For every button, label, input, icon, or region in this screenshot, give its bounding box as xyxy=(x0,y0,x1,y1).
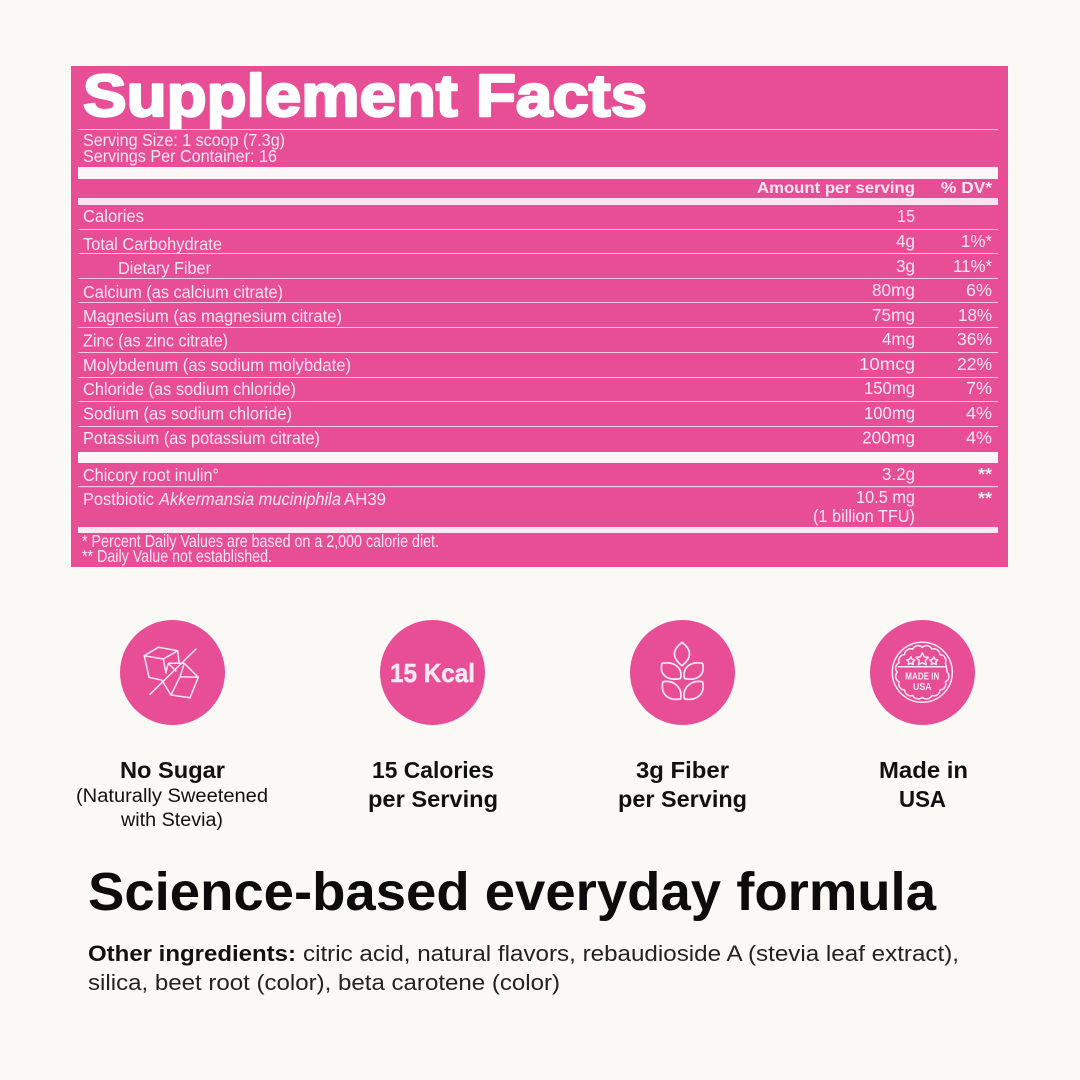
row: chloride xyxy=(83,378,992,399)
row: sodium: Sodium (as sodium chloride) xyxy=(83,404,292,424)
label: 15 calories: 15 Calories xyxy=(372,757,494,783)
footnotes xyxy=(82,531,439,566)
heading: Supplement Facts: Supplement Facts xyxy=(83,63,647,129)
row: calcium: 6% xyxy=(966,280,992,300)
serving information: Servings Per Container: 16 xyxy=(83,146,277,166)
row: calories xyxy=(83,206,915,226)
row: chloride: 7% xyxy=(966,378,992,398)
row: total carbohydrate xyxy=(83,231,992,254)
label: no sugar: (Naturally Sweetened xyxy=(76,786,268,807)
row: zinc: 4mg xyxy=(882,329,915,349)
label: no sugar: No Sugar xyxy=(120,757,225,783)
label: no sugar xyxy=(76,757,268,831)
row: magnesium: 75mg xyxy=(872,305,915,325)
row: dietary fiber xyxy=(118,256,992,278)
row: sodium: 4% xyxy=(966,403,992,423)
row: dietary fiber: 3g xyxy=(896,256,915,276)
icon: 15 Kcal xyxy=(380,620,485,725)
row: postbiotic: AH39 xyxy=(344,489,386,509)
row: potassium: 200mg xyxy=(862,428,915,448)
row: sodium: 100mg xyxy=(864,403,915,423)
icon: made in USA badge xyxy=(870,620,975,725)
row: total carbohydrate: 4g xyxy=(896,231,915,251)
row: postbiotic: ** xyxy=(978,488,992,508)
text block: other ingredients: citric acid, natural flavors, rebaudioside A (stevia leaf extract), xyxy=(303,941,959,966)
row: total carbohydrate: 1%* xyxy=(961,231,992,251)
serving information xyxy=(83,130,285,166)
table header: % DV* xyxy=(941,180,993,197)
row: zinc: 36% xyxy=(957,329,992,349)
row: zinc xyxy=(83,329,992,350)
label: 3g fiber: per Serving xyxy=(618,786,747,812)
row: zinc: Zinc (as zinc citrate) xyxy=(83,330,228,350)
table header: Amount per serving xyxy=(757,180,915,197)
footnotes: ** Daily Value not established. xyxy=(82,546,272,566)
label: no sugar: with Stevia) xyxy=(120,810,223,831)
row: calories: 15 xyxy=(897,206,915,226)
table header xyxy=(757,180,993,197)
row: chloride: Chloride (as sodium chloride) xyxy=(83,379,296,399)
row: magnesium xyxy=(83,305,992,326)
text block: other ingredients: silica, beet root (color), beta carotene (color) xyxy=(88,970,560,995)
icon: 15 Kcal: 15 Kcal xyxy=(390,658,475,688)
row: postbiotic: 10.5 mg xyxy=(856,487,915,507)
panel: supplement facts xyxy=(71,63,1008,567)
row: postbiotic xyxy=(83,487,992,526)
row: molybdenum: 10mcg xyxy=(859,354,915,374)
row: dietary fiber: 11%* xyxy=(953,256,992,276)
row: chicory root inulin: ** xyxy=(978,464,992,484)
row: total carbohydrate: Total Carbohydrate xyxy=(83,234,222,254)
row: chicory root inulin: Chicory root inulin° xyxy=(83,465,219,485)
heading: science-based everyday formula: Science-based everyday formula xyxy=(88,862,937,922)
row: magnesium: 18% xyxy=(958,305,992,325)
row: chloride: 150mg xyxy=(864,378,915,398)
label: 15 calories: per Serving xyxy=(368,786,498,812)
row: calories: Calories xyxy=(83,206,144,226)
serving information: Serving Size: 1 scoop (7.3g) xyxy=(83,130,285,150)
row: chicory root inulin: 3.2g xyxy=(882,464,915,484)
label: made in USA: Made in xyxy=(879,757,968,783)
row: calcium xyxy=(83,280,992,302)
row: potassium: Potassium (as potassium citrate) xyxy=(83,428,320,448)
row: calcium: 80mg xyxy=(872,280,915,300)
row: postbiotic: Akkermansia muciniphila xyxy=(158,489,341,509)
row: dietary fiber: Dietary Fiber xyxy=(118,258,211,278)
label: 3g fiber: 3g Fiber xyxy=(636,757,729,783)
row: chicory root inulin xyxy=(83,464,992,485)
row: sodium xyxy=(83,403,992,424)
row: postbiotic: Postbiotic xyxy=(83,489,154,509)
label: made in USA: USA xyxy=(899,786,946,812)
text block: other ingredients xyxy=(88,941,959,995)
row: molybdenum xyxy=(83,354,992,375)
row: molybdenum: Molybdenum (as sodium molybdate) xyxy=(83,355,351,375)
row: potassium xyxy=(83,428,992,448)
row: magnesium: Magnesium (as magnesium citrate) xyxy=(83,306,342,326)
row: potassium: 4% xyxy=(966,428,992,448)
row: molybdenum: 22% xyxy=(957,354,992,374)
label: 15 calories xyxy=(368,757,498,812)
row: calcium: Calcium (as calcium citrate) xyxy=(83,282,283,302)
icon: made in USA badge: USA xyxy=(913,682,932,693)
icon: made in USA badge: MADE IN xyxy=(905,672,939,682)
icon: no sugar xyxy=(120,620,225,725)
label: 3g fiber xyxy=(618,757,747,812)
label: made in USA xyxy=(879,757,968,812)
text block: other ingredients: Other ingredients: xyxy=(88,941,296,966)
row: postbiotic: (1 billion TFU) xyxy=(813,506,915,526)
icon: fiber wheat xyxy=(630,620,735,725)
footnotes: * Percent Daily Values are based on a 2,000 calorie diet. xyxy=(82,531,439,551)
